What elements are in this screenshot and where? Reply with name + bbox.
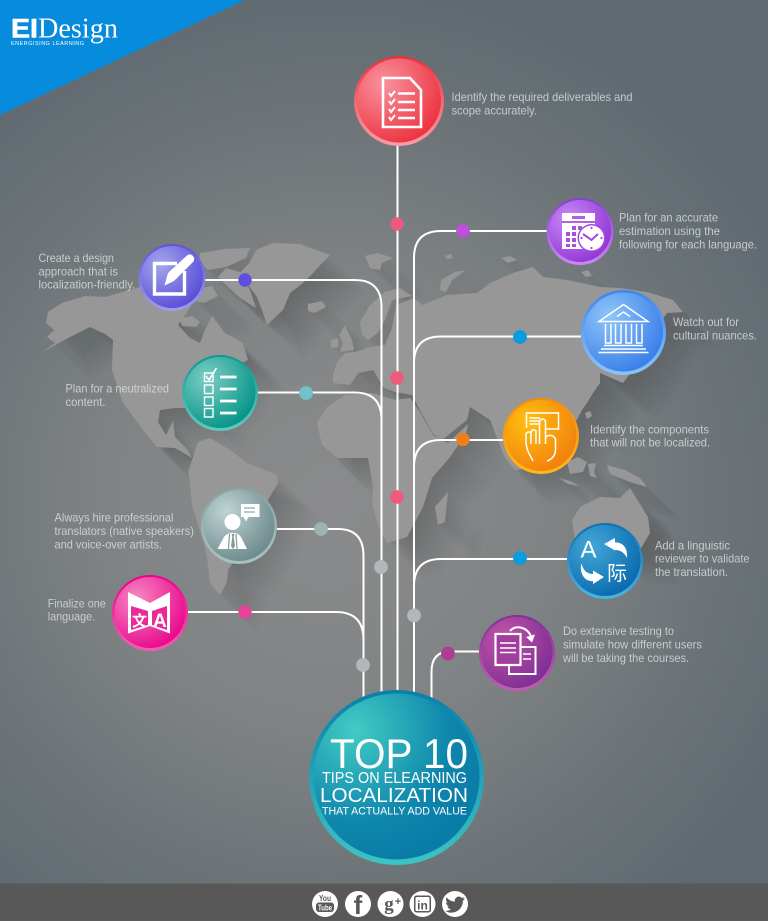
tip 4 text: Create a design (38, 251, 114, 265)
footer bar (0, 884, 768, 921)
tip 9 text: Add a linguistic (655, 538, 730, 552)
tip 10 text: will be taking the courses. (562, 651, 689, 665)
icon: youtube: You (319, 894, 331, 903)
logo: EIDesign (11, 12, 118, 47)
tip 8 text: Finalize one (48, 596, 106, 610)
tip 4 text: approach that is (38, 264, 118, 278)
tip 8: finalize one language icon: A (153, 611, 167, 632)
title: top 10: TOP 10 (330, 730, 468, 777)
icon: facebook: f (354, 890, 363, 920)
tip 10: extensive testing icon (479, 615, 555, 691)
tip 3 text: cultural nuances. (673, 329, 757, 343)
tip 5: neutralized content icon (182, 355, 258, 431)
icon: youtube: Tube (318, 904, 332, 912)
tip 1 text: scope accurately. (452, 104, 537, 118)
tip 9: linguistic reviewer icon (567, 523, 643, 599)
tip 6 text: that will not be localized. (590, 436, 710, 450)
tip 3: cultural nuances icon (581, 290, 666, 375)
tip 9: linguistic reviewer icon: 际 (607, 562, 627, 585)
tip 7 text: translators (native speakers) (54, 524, 194, 538)
connector lines (188, 146, 581, 700)
icon: google plus: + (395, 896, 401, 908)
icon: linkedin (410, 891, 436, 917)
logo: EIDesign: Design (38, 12, 118, 44)
icon: google plus: g (384, 894, 394, 915)
tip 1 text: Identify the required deliverables and (452, 90, 632, 104)
title badge (309, 690, 484, 865)
tip 6 text: Identify the components (590, 422, 709, 436)
tip 1: deliverables icon (354, 56, 444, 146)
tip 8: finalize one language icon: 文 (132, 612, 147, 630)
icon: youtube (312, 891, 338, 917)
tip 2 text: Plan for an accurate (619, 211, 718, 225)
tip 4 text: localization-friendly. (38, 278, 135, 292)
tip 4: design approach icon (138, 244, 206, 311)
tip 2 text: following for each language. (619, 238, 757, 252)
tip 9: linguistic reviewer icon: A (580, 537, 597, 564)
logo: EIDesign: EI (11, 14, 38, 44)
tip 9 text: reviewer to validate (655, 552, 750, 566)
title: that actually add value: THAT ACTUALLY ADD VALUE (322, 806, 467, 818)
logo: EIDesign: ENERGISING LEARNING (11, 41, 84, 47)
tip 8 text: language. (48, 610, 95, 624)
tip 7: professional translators icon (201, 488, 277, 564)
social icons (312, 890, 468, 920)
tip 2: estimation icon (546, 198, 614, 265)
tip 10 text: Do extensive testing to (563, 624, 674, 638)
icon: linkedin: in (417, 898, 428, 912)
tip 3 text: Watch out for (673, 315, 739, 329)
tip 5 text: content. (66, 395, 106, 409)
tip 10 text: simulate how different users (563, 638, 702, 652)
tip 2 text: estimation using the (619, 224, 720, 238)
blue corner banner (0, 0, 245, 115)
icon: facebook (345, 890, 371, 920)
icon: twitter (442, 891, 468, 917)
tip 5 text: Plan for a neutralized (66, 382, 169, 396)
connector dots (238, 217, 527, 672)
tip 6: non-localized components icon (503, 398, 579, 474)
tip 9 text: the translation. (655, 565, 728, 579)
tip 7 text: Always hire professional (54, 511, 174, 525)
tip 7 text: and voice-over artists. (54, 537, 162, 551)
title: localization: LOCALIZATION (320, 784, 468, 807)
icon: google plus (378, 891, 404, 917)
world map (42, 243, 719, 631)
title: tips on elearning: TIPS ON ELEARNING (322, 770, 467, 787)
tip 8: finalize one language icon (112, 575, 188, 651)
